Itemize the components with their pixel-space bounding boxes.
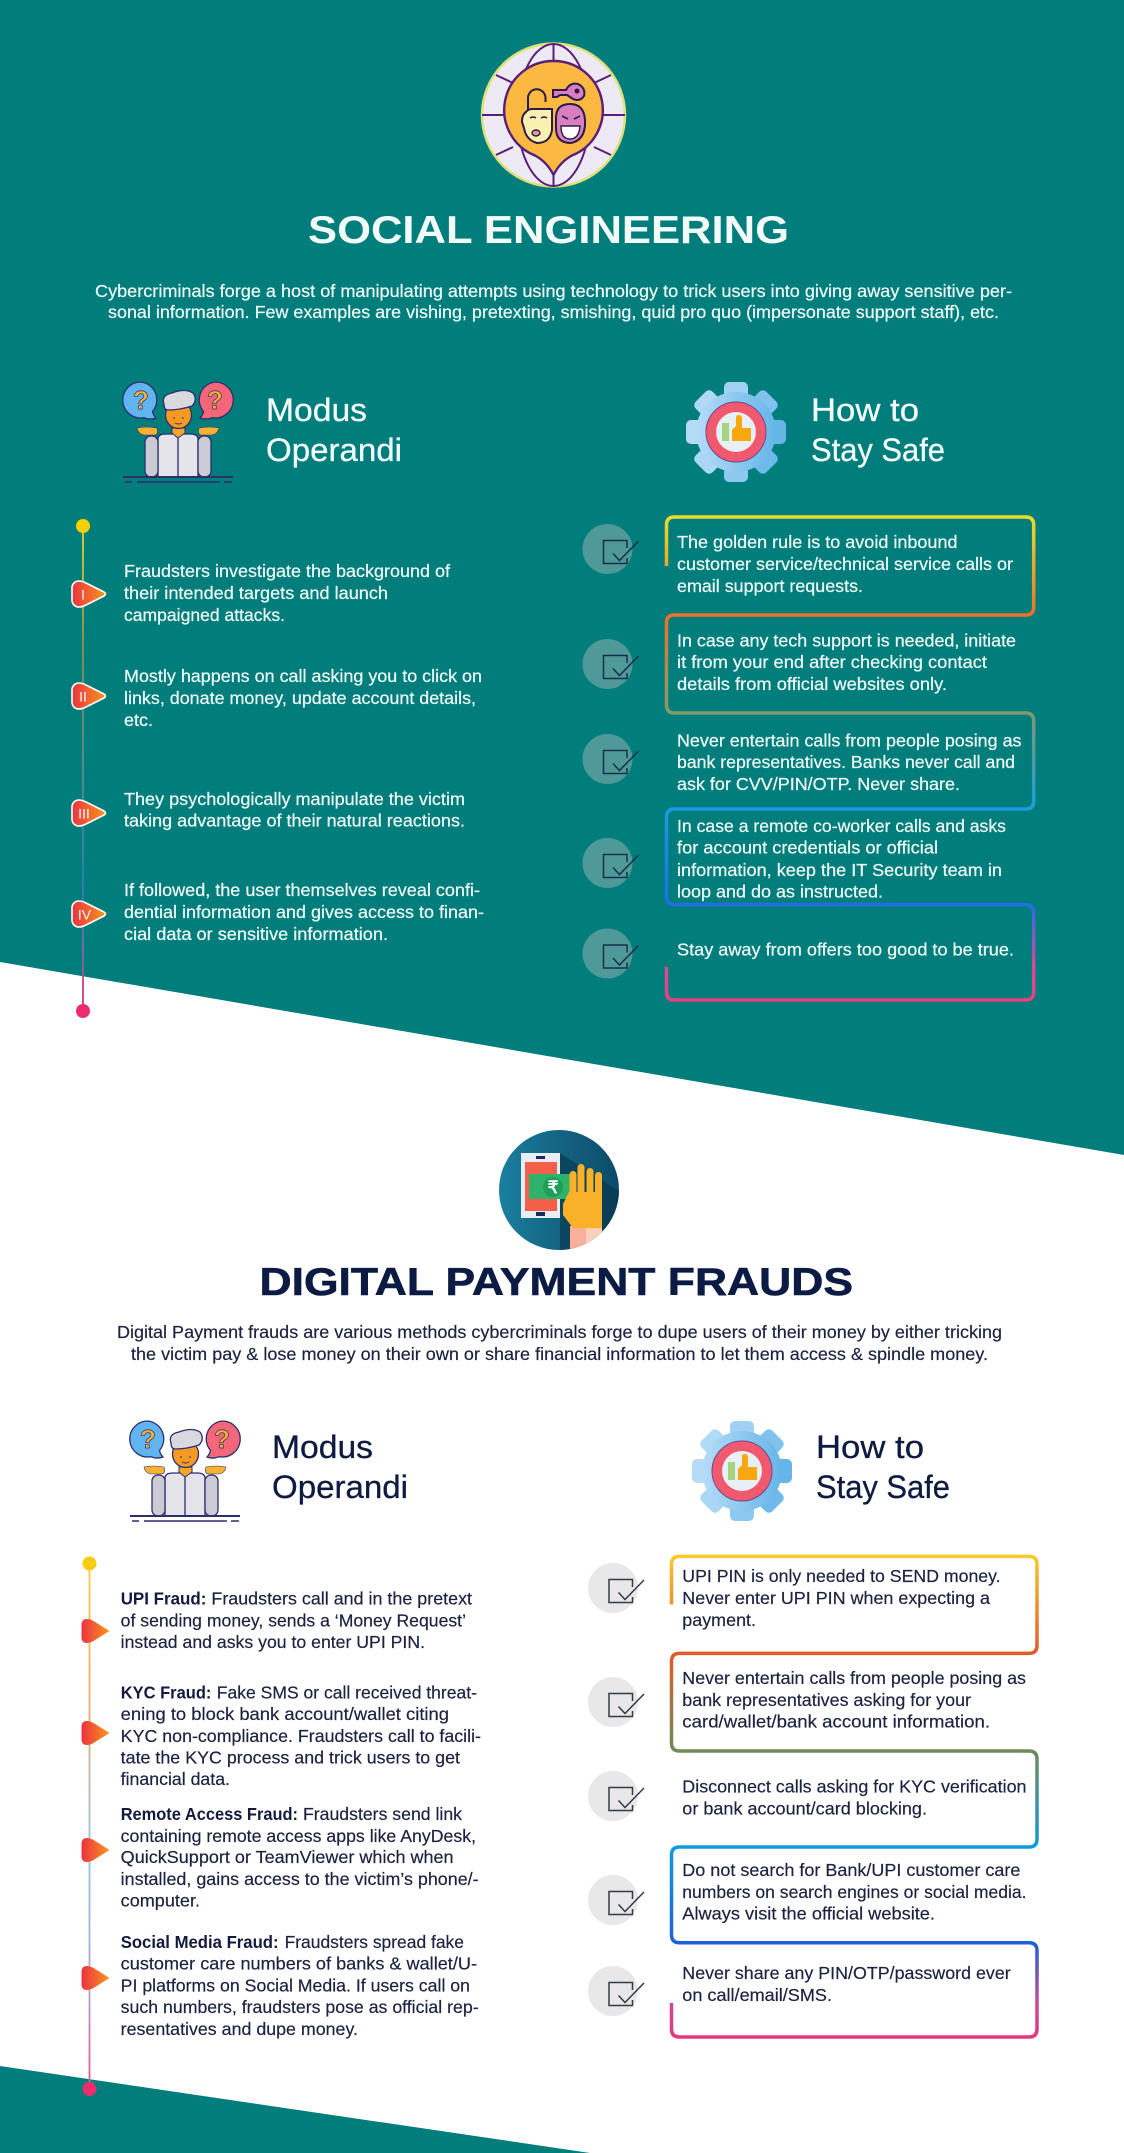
tip 4 text (677, 816, 1006, 902)
intro text: social engineering (95, 281, 1012, 322)
text: KYC fraud: ening to block bank account/wallet citing (121, 1704, 449, 1724)
tip 2 text (section 2): card/wallet/bank account information. (682, 1712, 990, 1732)
icon: gear with thumbs up (section 1) (686, 382, 786, 482)
tip 5 text (section 2) (682, 1963, 1011, 2005)
intro text: digital payment frauds (117, 1322, 1002, 1364)
text: remote access fraud: Fraudsters send link (303, 1804, 462, 1824)
text: UPI fraud: of sending money, sends a ‘Money Request’ (121, 1610, 466, 1630)
icon: phone payment with rupee note and hand: ₹ (548, 1178, 559, 1197)
tip 3 text: ask for CVV/PIN/OTP. Never share. (677, 774, 960, 794)
text: social media fraud: Fraudsters spread fake (285, 1932, 464, 1952)
heading: modus operandi (section 1) (266, 392, 402, 468)
marker III (72, 800, 106, 826)
icon: phone payment with rupee note and hand (499, 1130, 625, 1256)
heading: how to stay safe (section 1): Stay Safe (811, 432, 945, 468)
heading: modus operandi (section 2) (272, 1429, 408, 1505)
text: KYC fraud: KYC non-compliance. Fraudsters call to facili- (121, 1726, 481, 1746)
text: social media fraud (121, 1932, 479, 2039)
text: remote access fraud: installed, gains access to the victim’s phone/- (121, 1869, 479, 1889)
text: social media fraud: PI platforms on Social Media. If users call on (121, 1976, 470, 1996)
text: KYC fraud: tate the KYC process and trick users to get (121, 1748, 460, 1768)
text: modus operandi III (124, 789, 465, 830)
tip 3 text: bank representatives. Banks never call and (677, 752, 1015, 772)
tip 2 text (677, 630, 1016, 694)
icon: confused person (section 1) (123, 382, 233, 482)
tip 1 text: customer service/technical service calls or (677, 554, 1013, 574)
marker IV (72, 901, 106, 927)
tip 4 text: In case a remote co-worker calls and asks (677, 816, 1006, 836)
text: modus operandi II: links, donate money, update account details, (124, 688, 476, 708)
tip 2 text: In case any tech support is needed, initiate (677, 630, 1016, 650)
text: KYC fraud: KYC Fraud: (121, 1682, 211, 1702)
tip 4 text: for account credentials or official (677, 838, 938, 858)
tip 1 text (677, 532, 1013, 596)
tip 1 text (section 2) (682, 1566, 1001, 1630)
tip 4 text: loop and do as instructed. (677, 882, 883, 902)
marker 2 (82, 1721, 110, 1745)
marker I (72, 581, 106, 607)
tip 2 text: it from your end after checking contact (677, 652, 987, 672)
marker II (72, 683, 106, 709)
text: UPI fraud (121, 1588, 472, 1652)
timeline: section 1 (72, 519, 106, 1018)
tip 5 text (section 2): Never share any PIN/OTP/password ever (682, 1963, 1011, 1983)
marker II: II (79, 688, 87, 704)
text: modus operandi II (124, 666, 482, 730)
marker I: I (81, 586, 85, 602)
tip 2 text (section 2) (682, 1668, 1026, 1732)
tip 1 text (section 2): Never enter UPI PIN when expecting a (682, 1588, 990, 1608)
tip 3 text (section 2): or bank account/card blocking. (682, 1798, 927, 1818)
text: modus operandi III: They psychologically manipulate the victim (124, 789, 465, 809)
text: KYC fraud: Fake SMS or call received threat- (217, 1682, 477, 1702)
text: social media fraud: customer care numbers of banks & wallet/U- (121, 1954, 477, 1974)
tip 4 text (section 2): numbers on search engines or social media. (682, 1882, 1026, 1902)
heading: modus operandi (section 1): Operandi (266, 432, 402, 468)
snake border: section 1 tips (666, 517, 1034, 1000)
text: modus operandi IV: cial data or sensitive information. (124, 924, 388, 944)
text: KYC fraud: financial data. (121, 1769, 230, 1789)
text: modus operandi IV: dential information and gives access to finan- (124, 902, 484, 922)
snake border: section 2 tips (672, 1556, 1037, 2037)
heading: how to stay safe (section 1): How to (811, 392, 919, 428)
text: UPI fraud: instead and asks you to enter UPI PIN. (121, 1632, 425, 1652)
icon: gear with thumbs up (section 2) (692, 1421, 792, 1521)
text: remote access fraud (121, 1804, 479, 1911)
intro text: digital payment frauds: Digital Payment frauds are various methods cybercriminals forge to dupe users of their money by either tricking (117, 1322, 1002, 1342)
heading: how to stay safe (section 2): How to (816, 1429, 924, 1465)
icon: confused person (section 2) (130, 1421, 240, 1521)
title: social engineering: SOCIAL ENGINEERING (308, 209, 789, 252)
tip 4 text (section 2): Always visit the official website. (682, 1904, 935, 1924)
heading: how to stay safe (section 2) (816, 1429, 950, 1505)
tip 3 text (section 2): Disconnect calls asking for KYC verification (682, 1776, 1026, 1796)
tip 1 text (section 2): UPI PIN is only needed to SEND money. (682, 1566, 1001, 1586)
marker III: III (78, 806, 90, 822)
text: modus operandi I (124, 561, 450, 625)
text: modus operandi I: campaigned attacks. (124, 605, 285, 625)
background: teal bottom wedge (0, 2066, 590, 2153)
tip 2 text (section 2): bank representatives asking for your (682, 1690, 971, 1710)
title: digital payment frauds: DIGITAL PAYMENT FRAUDS (260, 1261, 853, 1304)
text: modus operandi II: Mostly happens on call asking you to click on (124, 666, 482, 686)
checkbox icons: section 2 (588, 1563, 644, 2016)
marker 3 (82, 1838, 110, 1862)
intro text: social engineering: Cybercriminals forge a host of manipulating attempts using technology to trick users into giving away sensitive per- (95, 281, 1012, 301)
heading: how to stay safe (section 1) (811, 392, 945, 468)
timeline: section 2 (82, 1556, 110, 2096)
text: modus operandi IV (124, 880, 484, 944)
tip 4 text (section 2) (682, 1860, 1026, 1924)
tip 3 text (section 2) (682, 1776, 1026, 1818)
marker 4 (82, 1966, 110, 1990)
tip 1 text: email support requests. (677, 576, 863, 596)
heading: modus operandi (section 2): Modus (272, 1429, 373, 1465)
heading: modus operandi (section 1): Modus (266, 392, 367, 428)
text: remote access fraud: computer. (121, 1891, 200, 1911)
text: UPI fraud: Fraudsters call and in the pretext (211, 1588, 472, 1608)
tip 1 text (section 2): payment. (682, 1610, 756, 1630)
tip 3 text (677, 730, 1022, 794)
tip 1 text: The golden rule is to avoid inbound (677, 532, 958, 552)
icon: social engineering globe pin with faces (482, 44, 625, 186)
text: modus operandi I: Fraudsters investigate the background of (124, 561, 450, 581)
text: KYC fraud (121, 1682, 481, 1789)
intro text: social engineering: sonal information. Few examples are vishing, pretexting, smishing, quid pro quo (impersonate support staff), etc. (108, 302, 999, 322)
text: modus operandi IV: If followed, the user themselves reveal confi- (124, 880, 480, 900)
heading: modus operandi (section 2): Operandi (272, 1469, 408, 1505)
tip 4 text (section 2): Do not search for Bank/UPI customer care (682, 1860, 1020, 1880)
text: modus operandi I: their intended targets and launch (124, 583, 388, 603)
text: social media fraud: such numbers, fraudsters pose as official rep- (121, 1997, 479, 2017)
tip 5 text (section 2): on call/email/SMS. (682, 1985, 832, 2005)
tip 2 text: details from official websites only. (677, 674, 947, 694)
tip 4 text: information, keep the IT Security team in (677, 860, 1002, 880)
intro text: digital payment frauds: the victim pay & lose money on their own or share financial information to let them access & spindle money. (131, 1344, 988, 1364)
text: UPI fraud: UPI Fraud: (121, 1588, 206, 1608)
text: social media fraud: resentatives and dupe money. (121, 2019, 358, 2039)
text: social media fraud: Social Media Fraud: (121, 1932, 279, 1952)
marker 1 (82, 1619, 110, 1643)
marker IV: IV (78, 906, 92, 922)
tip 5 text: Stay away from offers too good to be true. (677, 940, 1014, 960)
tip 2 text (section 2): Never entertain calls from people posing as (682, 1668, 1026, 1688)
text: modus operandi II: etc. (124, 710, 153, 730)
text: remote access fraud: Remote Access Fraud: (121, 1804, 298, 1824)
text: remote access fraud: containing remote access apps like AnyDesk, (121, 1826, 476, 1846)
background: teal top band with diagonal edge (0, 0, 1124, 1155)
checkbox icons: section 1 (582, 524, 638, 978)
heading: how to stay safe (section 2): Stay Safe (816, 1469, 950, 1505)
text: modus operandi III: taking advantage of their natural reactions. (124, 810, 465, 830)
text: remote access fraud: QuickSupport or TeamViewer which when (121, 1847, 454, 1867)
tip 3 text: Never entertain calls from people posing as (677, 730, 1022, 750)
